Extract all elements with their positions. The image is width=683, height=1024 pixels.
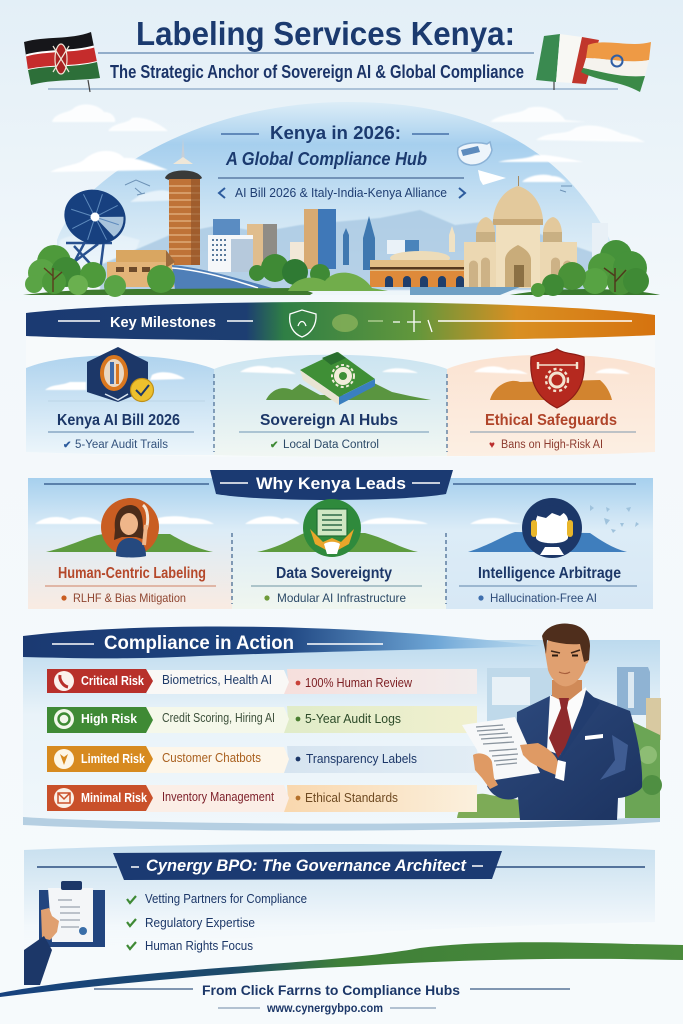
card background blue	[26, 355, 214, 455]
row: critical risk: Biometrics, Health AI	[162, 672, 272, 687]
head	[545, 640, 589, 686]
row: critical risk: Critical Risk	[81, 673, 145, 688]
bullet: ♥	[489, 440, 495, 451]
sleeve highlight	[600, 735, 628, 780]
right cell	[283, 669, 477, 694]
hills	[490, 380, 612, 400]
clouds	[35, 516, 522, 524]
satellite dish	[57, 182, 133, 272]
clouds	[45, 372, 185, 390]
heading: Intelligence Arbitrage	[478, 565, 621, 582]
neck	[552, 680, 582, 708]
hill	[257, 533, 418, 552]
card: Ethical Safeguards: Bans on High-Risk AI	[501, 439, 603, 451]
icon: woman in orange circle	[101, 498, 159, 558]
banner icons	[290, 310, 432, 337]
trees left	[23, 245, 388, 297]
lapel	[560, 690, 600, 760]
right cell	[283, 746, 477, 773]
dome clouds	[50, 151, 584, 290]
backdrop window	[457, 667, 662, 818]
heading: Kenya AI Bill 2026	[57, 412, 180, 429]
clouds	[240, 366, 418, 374]
icon	[54, 788, 74, 808]
hero text	[218, 122, 465, 200]
panel: why Kenya leads	[28, 470, 653, 609]
website: www.cynergybpo.com	[266, 1003, 383, 1015]
icon	[54, 671, 74, 691]
icon: navy hexagon seal	[87, 347, 154, 402]
column background left	[28, 478, 232, 609]
column: human-centric labeling: RLHF & Bias Mitigation	[73, 591, 186, 605]
background buildings	[208, 209, 608, 272]
mid cell	[147, 785, 289, 812]
banner	[26, 302, 655, 340]
column background middle	[232, 478, 446, 609]
pocket square	[585, 734, 603, 740]
column: data sovereignty	[251, 499, 422, 605]
hero heading line 2: A Global Compliance Hub	[225, 148, 427, 169]
scattered icons	[590, 505, 639, 533]
row: high risk: 5-Year Audit Logs	[305, 711, 401, 726]
bullet	[61, 595, 67, 601]
clouds	[474, 366, 630, 374]
heading: Ethical Safeguards	[485, 412, 617, 429]
row: limited risk: Customer Chatbots	[162, 750, 261, 765]
checklist: Vetting Partners for Compliance	[145, 891, 307, 906]
hero heading line 1: Kenya in 2026:	[270, 122, 401, 143]
row: limited risk	[47, 746, 477, 773]
card: Sovereign AI Hubs: Local Data Control	[283, 439, 379, 451]
panel: key milestones	[26, 302, 655, 457]
icon: red shield with gear	[531, 349, 584, 408]
row: minimal risk: Ethical Standards	[305, 790, 398, 805]
hill	[46, 534, 213, 552]
sky dome	[57, 102, 610, 295]
glass canopy	[172, 265, 272, 290]
mid cell	[147, 670, 289, 694]
icon: India flag	[581, 42, 651, 92]
mid cell	[147, 747, 289, 773]
heading tab	[210, 470, 453, 500]
heading: Data Sovereignty	[276, 565, 392, 582]
risk tag	[47, 669, 153, 693]
icon: green circle with document	[303, 499, 361, 557]
column: intelligence arbitrage: Hallucination-Free AI	[490, 591, 597, 605]
risk tag	[47, 707, 153, 733]
left hand	[473, 753, 498, 789]
bullet	[264, 595, 270, 601]
icon: hand holding clipboard	[24, 881, 105, 985]
checklist: Regulatory Expertise	[145, 915, 255, 930]
bullet: ✔	[270, 440, 278, 451]
banner title: Compliance in Action	[104, 633, 294, 654]
birds	[125, 180, 572, 195]
illustration: businessman with document	[462, 624, 642, 820]
banner title: Key Milestones	[110, 314, 216, 331]
distant mountains	[100, 210, 600, 290]
heading: Sovereign AI Hubs	[260, 412, 398, 429]
panel: compliance in action	[23, 624, 662, 831]
icon	[54, 709, 74, 729]
risk tag	[47, 746, 153, 772]
hero subheading: AI Bill 2026 & Italy-India-Kenya Alliance	[235, 186, 447, 200]
card: Ethical Safeguards	[470, 349, 636, 451]
clouds outside the dome	[52, 105, 645, 142]
hair	[542, 624, 590, 662]
icon: green book	[300, 352, 375, 405]
icon: navy circle with headset	[522, 498, 582, 558]
hill	[468, 532, 627, 552]
convention centre	[370, 251, 483, 287]
row: minimal risk: Minimal Risk	[81, 790, 148, 805]
cuff	[555, 760, 566, 781]
suit	[487, 695, 642, 820]
card background green	[214, 355, 447, 457]
card: Sovereign AI Hubs	[239, 352, 431, 451]
hills	[266, 382, 431, 400]
mosque	[449, 176, 577, 288]
panel background	[26, 336, 655, 457]
checklist	[127, 891, 307, 953]
right cell	[283, 785, 477, 812]
right hand	[520, 743, 558, 775]
row: high risk	[47, 706, 477, 733]
row: minimal risk	[47, 785, 477, 812]
trees right	[510, 240, 660, 297]
face	[551, 650, 580, 653]
icon: Italy flag	[536, 34, 599, 90]
column: human-centric labeling	[45, 498, 216, 605]
heading tab	[113, 851, 502, 880]
heading: Cynergy BPO: The Governance Architect	[146, 856, 467, 875]
panel background	[24, 844, 655, 950]
panel background	[23, 640, 660, 827]
column background right	[446, 478, 653, 609]
row: critical risk	[47, 669, 477, 694]
column: intelligence arbitrage	[459, 498, 639, 605]
row: high risk: Credit Scoring, Hiring AI	[162, 710, 275, 725]
low building	[107, 250, 175, 287]
shirt	[547, 687, 588, 755]
footer	[94, 982, 570, 1015]
main title: Labeling Services Kenya:	[136, 15, 515, 52]
tagline: From Click Farrns to Compliance Hubs	[202, 982, 460, 998]
bullet: ✔	[63, 440, 71, 451]
swoosh	[0, 942, 683, 997]
heading: Human-Centric Labeling	[58, 565, 206, 582]
water strip	[410, 287, 520, 295]
mid cell	[147, 707, 289, 733]
row: limited risk: Limited Risk	[81, 751, 146, 766]
card: Kenya AI Bill 2026	[45, 347, 205, 451]
risk tag	[47, 785, 153, 811]
document	[462, 717, 540, 780]
KICC tower	[165, 138, 202, 265]
banner	[23, 627, 540, 658]
icon: Kenya flag	[24, 32, 100, 92]
row: limited risk: Transparency Labels	[306, 751, 417, 766]
checklist: Human Rights Focus	[145, 938, 253, 953]
column: data sovereignty: Modular AI Infrastructure	[277, 591, 406, 605]
heading text: Why Kenya Leads	[256, 474, 406, 493]
right cell	[283, 706, 477, 733]
hero illustration	[23, 102, 660, 297]
bottom band	[23, 816, 660, 831]
icon: plane and cloud	[458, 142, 506, 185]
title header	[48, 15, 618, 89]
row: minimal risk: Inventory Management	[162, 789, 274, 804]
bullet	[478, 595, 484, 601]
panel: Cynergy BPO	[24, 844, 655, 985]
subtitle: The Strategic Anchor of Sovereign AI & Global Compliance	[110, 61, 524, 82]
card background peach	[447, 355, 655, 456]
icon	[54, 749, 74, 769]
row: critical risk: 100% Human Review	[305, 675, 413, 690]
tie	[549, 698, 573, 758]
card: Kenya AI Bill 2026: 5-Year Audit Trails	[75, 439, 168, 451]
row: high risk: High Risk	[81, 711, 138, 726]
